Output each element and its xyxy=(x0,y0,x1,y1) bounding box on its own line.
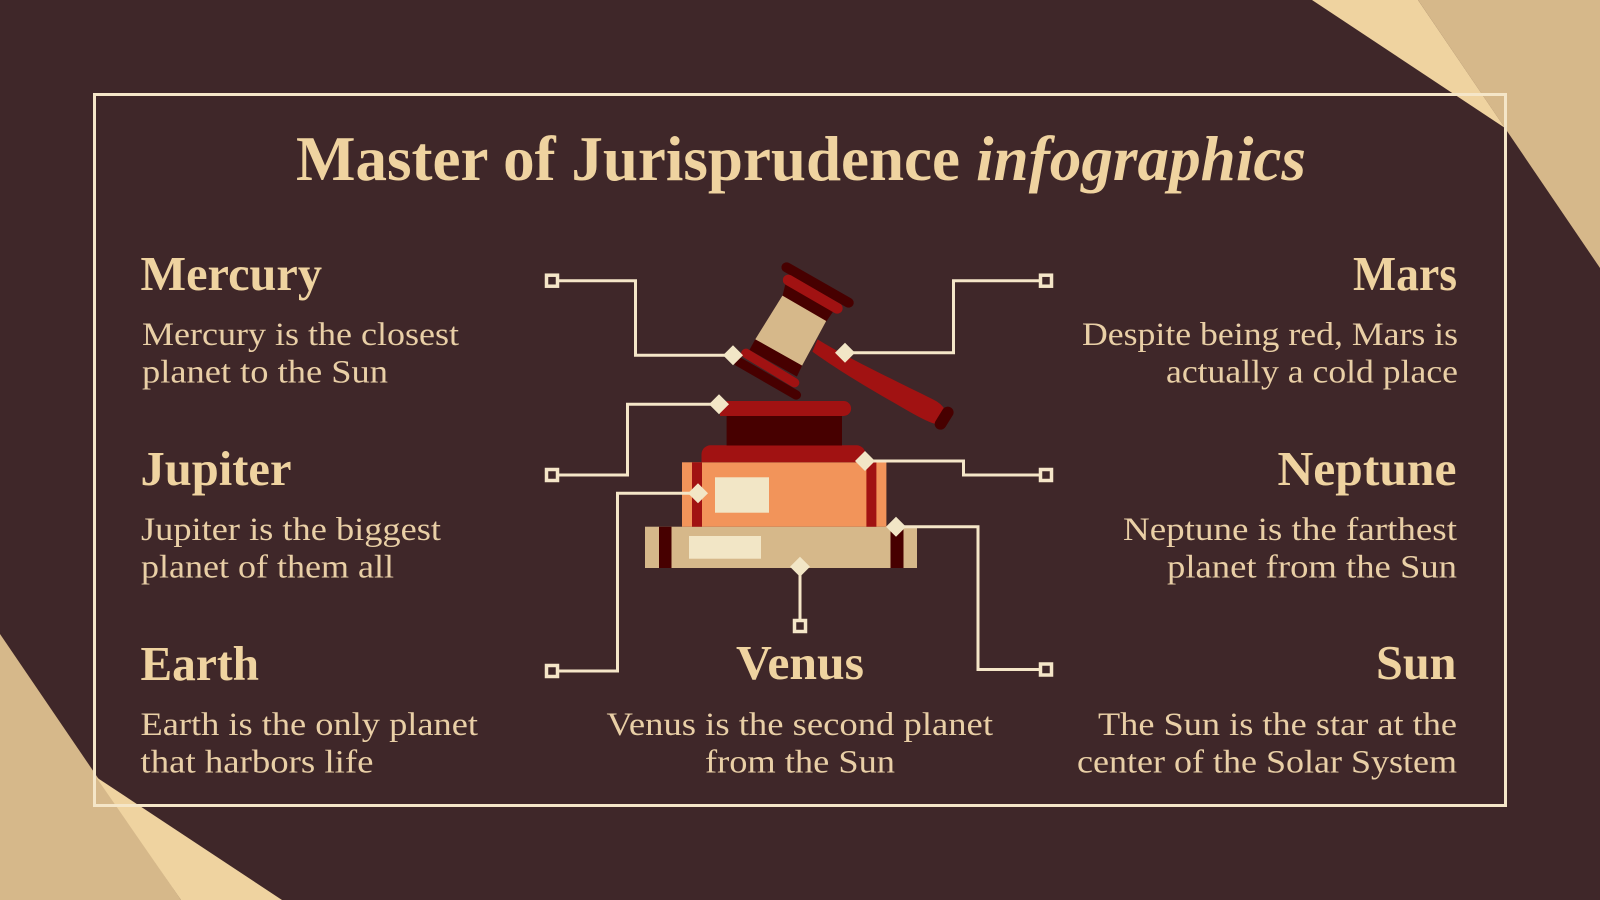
top book xyxy=(682,462,886,527)
text block: Neptune: Neptune is the farthest xyxy=(1123,512,1457,548)
text block: Jupiter xyxy=(140,441,441,586)
text block: Mercury: Mercury is the closest xyxy=(142,317,459,353)
text block: Jupiter: Jupiter is the biggest xyxy=(141,512,441,548)
title: Master of Jurisprudence xyxy=(296,123,960,194)
connector: Venus xyxy=(790,557,810,632)
bottom book xyxy=(645,527,917,568)
text block: Venus xyxy=(606,635,993,780)
corner decoration: bottom left xyxy=(0,634,282,900)
text block: Mercury xyxy=(140,246,459,390)
connector: Mars xyxy=(835,275,1052,363)
text block: Neptune: Neptune xyxy=(1278,441,1456,496)
connector: Jupiter xyxy=(546,394,729,480)
text block: Mars xyxy=(1082,246,1458,390)
text block: Jupiter: Jupiter xyxy=(140,441,292,496)
text block: Neptune: planet from the Sun xyxy=(1167,550,1457,586)
text block: Mars: Mars xyxy=(1353,246,1457,301)
text block: Earth xyxy=(140,636,478,780)
text block: Jupiter: planet of them all xyxy=(141,550,394,586)
text block: Mars: actually a cold place xyxy=(1166,354,1458,390)
gavel xyxy=(738,267,948,424)
text block: Sun: The Sun is the star at the xyxy=(1098,707,1457,743)
text block: Venus: Venus is the second planet xyxy=(606,707,993,743)
text block: Earth: Earth xyxy=(140,636,259,691)
text block: Mars: Despite being red, Mars is xyxy=(1082,317,1458,353)
connector: Neptune xyxy=(855,451,1052,480)
corner decoration: top right xyxy=(1312,0,1600,268)
text block: Neptune xyxy=(1123,441,1457,586)
frame xyxy=(94,94,1506,806)
title xyxy=(296,123,1306,194)
text block: Venus: Venus xyxy=(736,635,864,690)
text block: Venus: from the Sun xyxy=(705,744,895,780)
text block: Earth: that harbors life xyxy=(140,744,374,780)
text block: Sun: Sun xyxy=(1376,635,1456,690)
connector: Sun xyxy=(886,517,1052,675)
text block: Earth: Earth is the only planet xyxy=(140,707,478,743)
text block: Mercury: Mercury xyxy=(140,246,322,301)
title: infographics xyxy=(976,123,1306,194)
connector: Mercury xyxy=(546,275,743,365)
illustration: gavel and books xyxy=(645,267,948,568)
text block: Sun xyxy=(1077,635,1457,780)
text block: Sun: center of the Solar System xyxy=(1077,744,1457,780)
connector: Earth xyxy=(546,483,708,676)
sound block xyxy=(702,401,866,462)
text block: Mercury: planet to the Sun xyxy=(142,354,388,390)
